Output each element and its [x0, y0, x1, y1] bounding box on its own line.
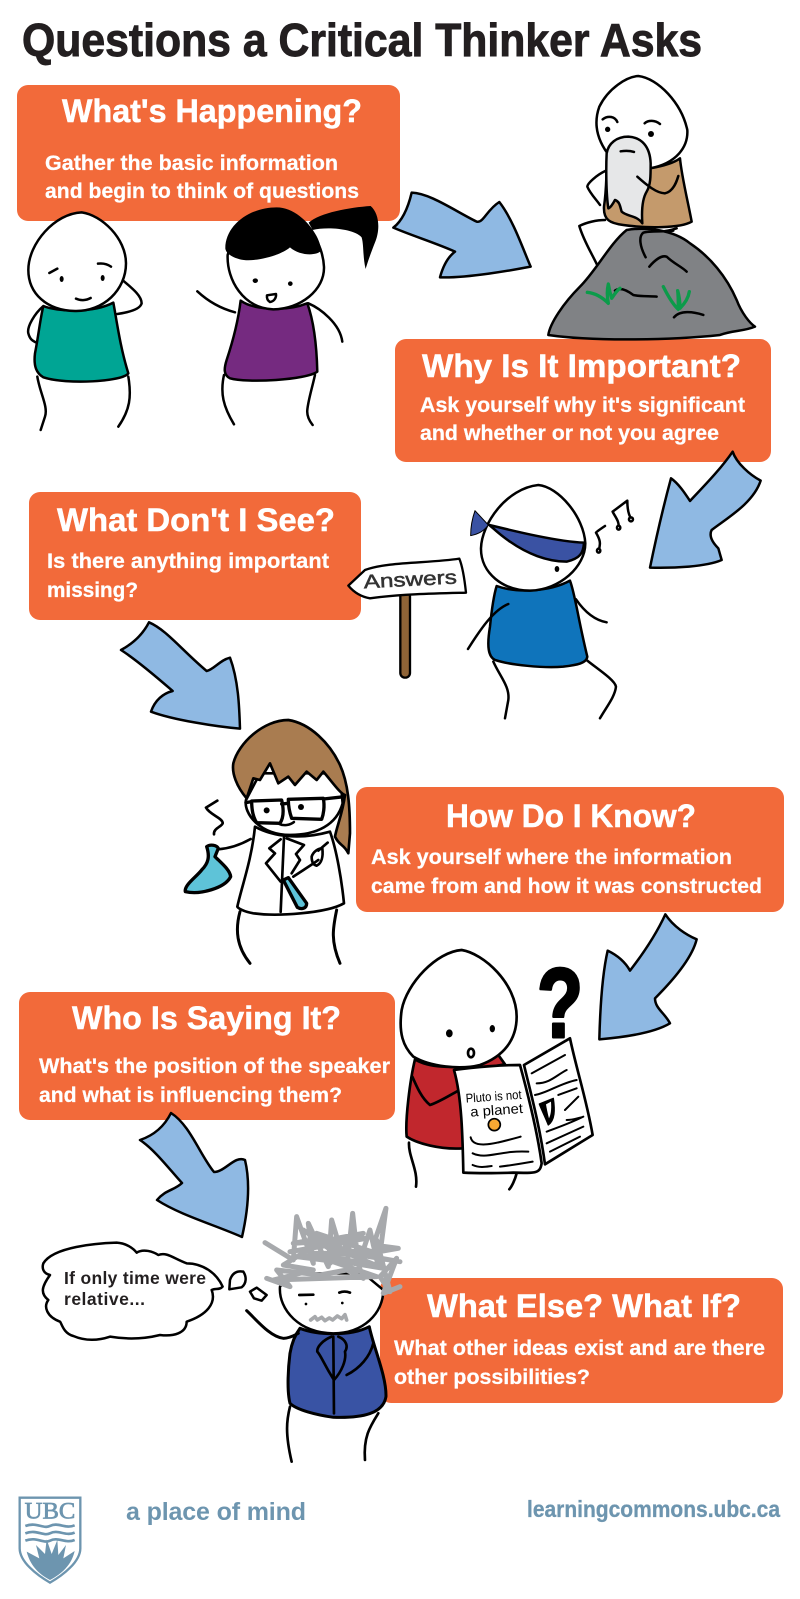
rock: [548, 229, 755, 339]
ponytail: [309, 206, 378, 269]
arrow 4: [599, 914, 697, 1039]
newspaper scribbles: [471, 1055, 583, 1167]
heading: What Don't I See?: [57, 502, 335, 538]
panel: what else what if: [380, 1278, 783, 1403]
figure: woman with ponytail: [197, 206, 378, 425]
figure: blindfolded walker: [468, 485, 633, 718]
hair: [233, 720, 350, 853]
fumes: [206, 801, 223, 834]
figure: einstein: [229, 1208, 400, 1462]
panel: who is saying it: [19, 992, 395, 1120]
purple shirt: [225, 301, 317, 381]
headline: Pluto is not: [465, 1088, 522, 1106]
robe: [604, 158, 692, 227]
tagline: a place of mind: [126, 1498, 307, 1526]
text block: Gather the basic information: [45, 152, 338, 175]
icon: question mark: ?: [537, 948, 583, 1058]
text block: Ask yourself why it's significant: [420, 394, 745, 417]
figure: reader with newspaper: [401, 950, 593, 1189]
logo sunburst: [27, 1539, 75, 1580]
blue shirt: [488, 581, 587, 667]
website url: learningcommons.ubc.ca: [527, 1496, 780, 1522]
text block line 2: came from and how it was constructed: [371, 875, 762, 898]
text block: What other ideas exist and are there: [394, 1337, 765, 1360]
pen hand: [312, 843, 328, 866]
text block: Ask yourself where the information: [371, 846, 732, 869]
cloud text line 2: relative...: [64, 1289, 145, 1309]
red shirt: [406, 1055, 505, 1149]
panel: why is it important: [395, 339, 771, 462]
text block line 2: and begin to think of questions: [45, 180, 359, 203]
logo waves: [25, 1525, 75, 1542]
cloud text: If only time were: [64, 1268, 206, 1288]
newspaper right page: [524, 1038, 593, 1164]
text block: What's the position of the speaker: [39, 1055, 390, 1078]
hair: [225, 207, 321, 260]
text block line 2: missing?: [47, 579, 138, 602]
face: [49, 263, 111, 300]
teal shirt: [35, 303, 128, 382]
newspaper left page: [454, 1065, 542, 1173]
heading: Why Is It Important?: [422, 348, 741, 384]
headline line 2: a planet: [470, 1100, 524, 1120]
knot: [471, 511, 488, 536]
heading: Who Is Saying It?: [72, 1000, 341, 1036]
head: [28, 212, 126, 311]
legs: [287, 1407, 378, 1462]
moustache: [311, 1315, 347, 1321]
arm: [468, 604, 508, 649]
panel: how do i know: [356, 787, 784, 912]
title: Questions a Critical Thinker Asks: [22, 14, 702, 66]
grass: [587, 284, 689, 309]
head: [280, 1273, 383, 1333]
suit: [288, 1327, 386, 1417]
face: [253, 278, 258, 283]
heading: How Do I Know?: [446, 798, 696, 834]
arm: [218, 839, 251, 849]
text block line 2: and what is influencing them?: [39, 1084, 342, 1107]
glasses: [246, 797, 344, 823]
heading: What's Happening?: [62, 93, 362, 129]
music notes: [596, 501, 632, 551]
heading: What Else? What If?: [427, 1288, 741, 1324]
suit lines: [317, 1337, 373, 1413]
figure: scientist: [185, 720, 350, 963]
flask: [185, 845, 231, 893]
text block line 2: and whether or not you agree: [420, 422, 719, 445]
figure: old sage on rock: [548, 76, 755, 339]
head: [401, 950, 517, 1067]
head: [228, 237, 324, 309]
test tube: [283, 878, 307, 909]
beard: [606, 137, 651, 223]
blindfold: [489, 525, 584, 562]
text block line 2: other possibilities?: [394, 1366, 590, 1389]
text block: Is there anything important: [47, 550, 329, 573]
arrow 2: [650, 452, 761, 568]
sign text: Answers: [363, 567, 457, 593]
face: [603, 117, 660, 152]
rock cracks: [615, 231, 703, 317]
scribbled hair: [265, 1208, 400, 1293]
arm: [412, 1077, 458, 1105]
thought cloud: [43, 1243, 223, 1340]
hand: [637, 176, 678, 193]
pluto dot: [488, 1119, 500, 1131]
logo letters: UBC: [25, 1499, 75, 1525]
head: [481, 485, 585, 591]
head: [596, 76, 687, 168]
face: [246, 773, 343, 835]
signpost: answers: [348, 559, 466, 678]
arrow 1: [393, 193, 531, 277]
face: [299, 1292, 350, 1295]
logo: UBC shield: [20, 1498, 80, 1583]
figure: man scratching head: [28, 212, 142, 430]
arrow 3: [121, 622, 240, 729]
arrow 5: [140, 1113, 248, 1237]
lab coat: [237, 827, 344, 915]
collar and coat lines: [266, 837, 318, 912]
panel: what's happening: [17, 85, 400, 221]
panel: what don't i see: [29, 492, 361, 620]
thought puffs: [229, 1271, 267, 1301]
arm: [247, 1311, 298, 1338]
